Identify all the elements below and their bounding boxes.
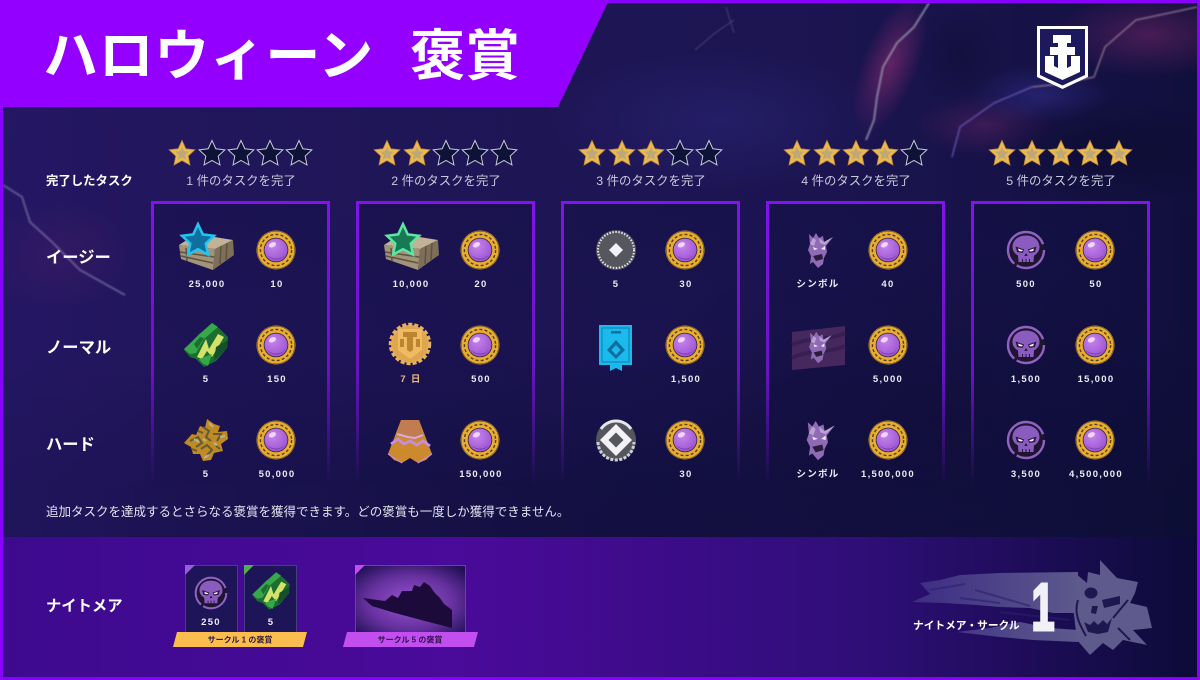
label: circle 1 rewards xyxy=(173,632,307,647)
panel: one task rewards: 10 xyxy=(270,279,284,290)
panel: one task rewards xyxy=(151,201,330,486)
panel: two task rewards: 20 xyxy=(474,279,488,290)
icon: demon symbol xyxy=(808,233,833,268)
icon: orange and purple container xyxy=(388,420,432,463)
panel: three task rewards: 5 xyxy=(613,279,619,290)
star rating: five tasks: 5 件のタスクを完了 xyxy=(1006,174,1116,188)
panel: nightmare rewards band xyxy=(2,537,1198,678)
row label: easy: イージー xyxy=(46,249,111,267)
panel: one task rewards: 150 xyxy=(267,374,287,385)
row label: normal: ノーマル xyxy=(46,339,111,357)
card: circle 1 camouflage xyxy=(244,565,296,632)
panel: five task rewards: 4,500,000 xyxy=(1069,469,1123,480)
panel: five task rewards: 15,000 xyxy=(1078,374,1114,385)
panel: four task rewards xyxy=(766,201,945,486)
star rating: four tasks: 4 件のタスクを完了 xyxy=(801,174,911,188)
panel: five task rewards: 3,500 xyxy=(1011,469,1041,480)
card: circle 5 ship silhouette xyxy=(355,565,466,632)
icon: skull token 500 xyxy=(1007,231,1045,269)
panel: four task rewards: 5,000 xyxy=(873,374,903,385)
panel: five task rewards: 500 xyxy=(1016,279,1036,290)
label: circle 1 rewards: サークル 1 の褒賞 xyxy=(208,634,272,644)
icon: demon flag xyxy=(792,326,845,370)
star rating: three tasks: 3 件のタスクを完了 xyxy=(596,174,706,188)
card: circle 1 camouflage: 5 xyxy=(268,617,274,628)
panel: one task rewards: 25,000 xyxy=(189,279,225,290)
star rating: one task: 1 件のタスクを完了 xyxy=(186,174,296,188)
emblem: nightmare circle brush stroke and skull xyxy=(912,560,1152,655)
panel: two task rewards: 500 xyxy=(471,374,491,385)
panel: four task rewards: 40 xyxy=(881,279,895,290)
note: additional tasks: 追加タスクを達成するとさらなる褒賞を獲得できます。どの褒賞も一度しか獲得できません。 xyxy=(46,504,569,519)
icon: crate with green star xyxy=(384,224,439,270)
title xyxy=(43,25,520,87)
number: current circle: 1 xyxy=(1031,570,1055,644)
icon: green camouflage xyxy=(184,323,228,367)
star rating: two tasks xyxy=(374,140,517,188)
star rating: one task xyxy=(169,140,312,188)
card: circle 1 skull tokens: 250 xyxy=(201,617,221,628)
icon: gold laurel premium medal xyxy=(390,324,430,364)
panel: three task rewards: 30 xyxy=(679,469,693,480)
panel: four task rewards: 1,500,000 xyxy=(861,469,915,480)
icon: crate with blue star xyxy=(179,224,234,270)
title: 褒賞 xyxy=(410,25,520,87)
panel: two task rewards: 10,000 xyxy=(393,279,429,290)
row label: nightmare: ナイトメア xyxy=(46,598,122,615)
panel: two task rewards: 150,000 xyxy=(459,469,503,480)
title: ハロウィーン xyxy=(43,25,374,87)
panel: one task rewards: 5 xyxy=(203,469,209,480)
panel: five task rewards: 50 xyxy=(1089,279,1103,290)
header banner xyxy=(0,0,609,107)
star rating: three tasks xyxy=(579,140,722,188)
panel: three task rewards xyxy=(561,201,740,486)
panel: two task rewards: 7 日 xyxy=(400,374,422,385)
panel: one task rewards: 50,000 xyxy=(259,469,295,480)
row label: hard: ハード xyxy=(46,436,95,454)
panel: three task rewards: 1,500 xyxy=(671,374,701,385)
star rating: four tasks xyxy=(784,140,927,188)
icon: silver laurel diamond token xyxy=(596,420,636,460)
icon: skull token 1,500 xyxy=(1007,326,1045,364)
card: circle 1 skull tokens xyxy=(185,565,238,632)
label: circle 5 rewards xyxy=(343,632,478,647)
star rating: five tasks xyxy=(989,140,1132,188)
icon: skull token 3,500 xyxy=(1007,421,1045,459)
panel: one task rewards: 5 xyxy=(203,374,209,385)
icon: grey diamond token xyxy=(596,230,636,270)
panel: five task rewards xyxy=(971,201,1150,486)
panel: two task rewards xyxy=(356,201,535,486)
panel: four task rewards: シンボル xyxy=(796,278,840,290)
star rating: two tasks: 2 件のタスクを完了 xyxy=(391,174,501,188)
icon: naval shield logo xyxy=(1037,26,1088,89)
panel: four task rewards: シンボル xyxy=(796,468,840,480)
panel: five task rewards: 1,500 xyxy=(1011,374,1041,385)
label: nightmare circle: ナイトメア・サークル xyxy=(913,620,1020,632)
panel: three task rewards: 30 xyxy=(679,279,693,290)
icon: blue certificate ribbon xyxy=(599,325,632,371)
icon: gold camouflage xyxy=(184,419,228,461)
row label: completed tasks: 完了したタスク xyxy=(46,173,133,188)
icon: crowned demon symbol xyxy=(807,421,835,460)
label: circle 5 rewards: サークル 5 の褒賞 xyxy=(378,634,442,644)
